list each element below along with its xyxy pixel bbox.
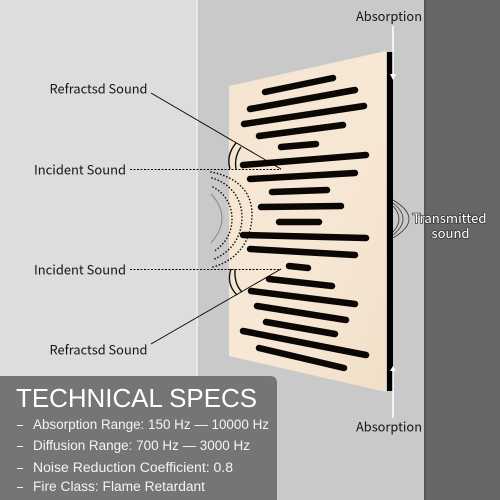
- arrow: absorption down: [390, 26, 396, 80]
- transmitted text: line one: Transmitted: [412, 208, 486, 227]
- spec: diffusion range: Diffusion Range: 700 Hz — 3000 Hz: [33, 438, 250, 453]
- panel black backing: [387, 52, 393, 391]
- panel: technical specs: [0, 376, 277, 500]
- transmitted sound arcs: [393, 200, 409, 238]
- label: incident sound top: Incident Sound: [34, 160, 126, 178]
- label: transmitted sound: [412, 208, 486, 242]
- sound waves: inner arc: [211, 194, 222, 243]
- sound waves: incident dotted arcs: [211, 172, 252, 267]
- label: refracted sound top: Refractsd Sound: [50, 78, 148, 98]
- label: incident sound bottom: Incident Sound: [34, 260, 126, 278]
- leader: upper refracted sound: [151, 93, 281, 169]
- label: absorption bottom: Absorption: [356, 416, 422, 436]
- refracted arcs: bottom: [229, 269, 242, 295]
- arrow: absorption up: [390, 366, 396, 418]
- leader: lower refracted sound: [151, 269, 281, 344]
- leader: upper incident sound: [130, 168, 281, 170]
- background: dark wall: [424, 0, 500, 500]
- label: absorption top: Absorption: [356, 6, 422, 25]
- background: left wall: [0, 0, 197, 500]
- heading: technical specs: TECHNICAL SPECS: [16, 383, 257, 413]
- panel wood face: [229, 51, 386, 392]
- label: refracted sound bottom: Refractsd Sound: [50, 340, 148, 358]
- spec bullets: [17, 425, 23, 488]
- leader: lower incident sound: [130, 268, 281, 270]
- spec: noise reduction coefficient: Noise Reduction Coefficient: 0.8: [33, 460, 233, 475]
- spec: absorption range: Absorption Range: 150 Hz — 10000 Hz: [33, 417, 269, 432]
- panel slots: [243, 78, 366, 368]
- spec: fire class: Fire Class: Flame Retardant: [33, 479, 205, 494]
- transmitted text: line two: sound: [432, 223, 470, 242]
- refracted arcs: top: [229, 143, 241, 169]
- acoustic panel: [229, 51, 393, 392]
